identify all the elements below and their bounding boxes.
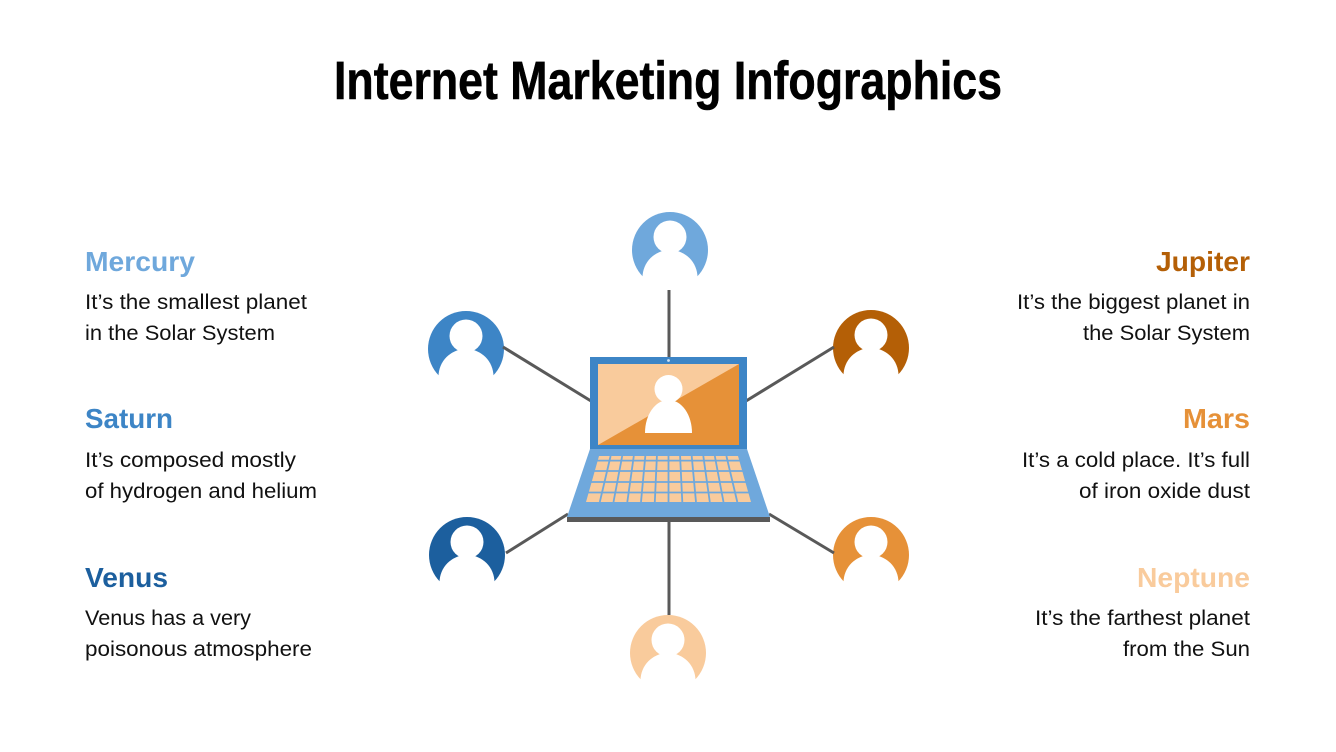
panel: Saturn text <box>85 403 317 503</box>
icon: screen user <box>645 375 692 433</box>
panel: Neptune text: from the Sun <box>1123 637 1250 661</box>
panel: Saturn text: Saturn <box>85 403 173 434</box>
laptop screen bezel <box>590 357 747 449</box>
panel: Jupiter text: Jupiter <box>1156 246 1250 277</box>
laptop display <box>598 359 739 445</box>
laptop front edge <box>567 517 770 522</box>
panel: Mars text: of iron oxide dust <box>1079 479 1250 503</box>
icon: laptop <box>567 357 770 522</box>
icon: user lower right (Mars orange) <box>833 517 909 610</box>
panel: Mars text: It’s a cold place. It’s full <box>1022 448 1250 472</box>
panel: Mercury text: in the Solar System <box>85 321 275 345</box>
panel: Venus text: Venus <box>85 562 168 593</box>
panel: Venus text: poisonous atmosphere <box>85 637 312 661</box>
panel: Jupiter text: the Solar System <box>1083 321 1250 345</box>
panel: Mars text <box>1022 403 1250 503</box>
connector lines <box>503 290 834 615</box>
panel: Neptune text <box>1035 562 1250 661</box>
panel: Mercury text: Mercury <box>85 246 195 277</box>
panel: Mercury text <box>85 246 307 345</box>
panel: Saturn text: It’s composed mostly <box>85 448 296 472</box>
panel: Mercury text: It’s the smallest planet <box>85 290 307 314</box>
icon: user upper right (Jupiter brown) <box>833 310 909 403</box>
panel: Venus text: Venus has a very <box>85 606 251 630</box>
icon: user top (Mercury blue) <box>632 212 708 305</box>
panel: Saturn text: of hydrogen and helium <box>85 479 317 503</box>
panel: Mars text: Mars <box>1183 403 1250 434</box>
icon: user lower left (Venus navy) <box>429 517 505 610</box>
panel: Venus text <box>85 562 312 661</box>
keyboard <box>585 456 752 502</box>
icon: user bottom (Neptune peach) <box>630 615 706 708</box>
panel: Neptune text: It’s the farthest planet <box>1035 606 1250 630</box>
icon: user upper left (Saturn blue) <box>428 311 504 404</box>
title: Internet Marketing Infographics <box>334 51 1002 111</box>
panel: Jupiter text <box>1017 246 1250 345</box>
laptop base <box>567 449 770 517</box>
panel: Jupiter text: It’s the biggest planet in <box>1017 290 1250 314</box>
panel: Neptune text: Neptune <box>1137 562 1250 593</box>
